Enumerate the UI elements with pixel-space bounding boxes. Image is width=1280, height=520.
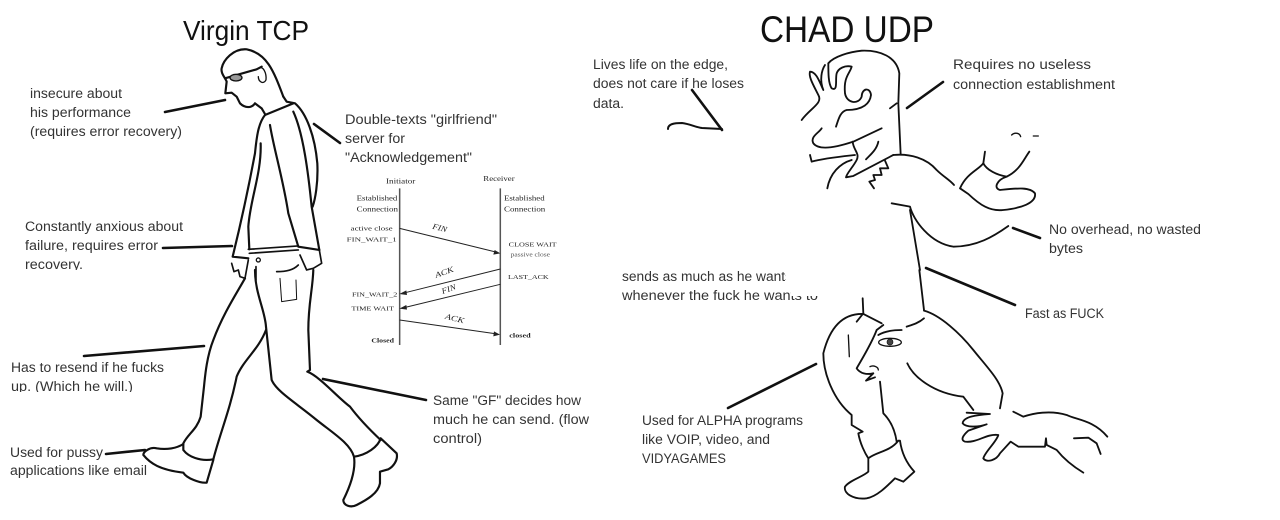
text: same GF: much he can send. (flow — [433, 412, 589, 427]
chart: TCP connection close sequence diagram: LAST_ACK — [508, 274, 549, 281]
figure: chad head and neck — [802, 51, 1038, 270]
text: has to resend: up. (Which he will.) — [11, 379, 133, 394]
text: double-texts: server for — [345, 131, 406, 146]
text: sends as much: sends as much as he wants — [622, 269, 792, 284]
text: requires no useless connection — [953, 57, 1115, 92]
text: used for applications: Used for pussy — [10, 445, 103, 460]
text: constantly anxious: failure, requires error — [25, 238, 159, 253]
chart: TCP connection close sequence diagram: FIN_WAIT_2 — [352, 291, 397, 298]
text: no overhead: bytes — [1049, 241, 1083, 256]
chart: TCP connection close sequence diagram: CLOSE WAIT — [509, 241, 557, 248]
text: lives life on the edge — [593, 57, 744, 111]
text: constantly anxious — [20, 219, 183, 276]
title: Virgin TCP: Virgin TCP — [183, 15, 309, 46]
text: constantly anxious: recovery. — [25, 257, 83, 272]
text: has to resend: Has to resend if he fucks — [11, 360, 164, 375]
callouts: virgin leader lines — [84, 100, 426, 454]
text: sends as much: whenever the fuck he wants to — [621, 288, 818, 303]
text: constantly anxious: Constantly anxious about — [25, 219, 183, 234]
text: used for applications: applications like email — [10, 463, 147, 478]
chart: TCP connection close sequence diagram: Initiator — [386, 176, 416, 185]
title: CHAD UDP: CHAD UDP — [760, 9, 934, 50]
text: lives life on the edge: data. — [593, 96, 624, 111]
text: same GF: Same "GF" decides how — [433, 393, 581, 408]
text: lives life on the edge: does not care if he loses — [593, 76, 744, 91]
text: used for applications — [10, 445, 147, 478]
text: fast as fuck: Fast as FUCK — [1025, 306, 1104, 321]
chart: TCP connection close sequence diagram: Closed — [371, 338, 394, 345]
text: sends as much — [621, 268, 820, 303]
chart: TCP connection close sequence diagram: active close — [351, 226, 393, 233]
chart: TCP connection close sequence diagram: TIME WAIT — [351, 305, 394, 312]
text: requires no useless connection: Requires no useless — [953, 57, 1091, 72]
text: insecure about performance — [30, 86, 182, 139]
text: has to resend — [0, 360, 170, 400]
fragment: clipped arc under lives-life text — [668, 123, 722, 129]
chart: TCP connection close sequence diagram: FIN — [439, 282, 458, 296]
text: insecure about performance: insecure about — [30, 86, 122, 101]
callouts: chad leader lines — [692, 82, 1040, 408]
text: double-texts: "Acknowledgement" — [345, 150, 472, 165]
text: lives life on the edge: Lives life on the edge, — [593, 57, 728, 72]
text: no overhead: No overhead, no wasted — [1049, 222, 1201, 237]
chart: TCP connection close sequence diagram: Connection — [504, 204, 546, 213]
figure: virgin legs — [143, 270, 397, 506]
text: requires no useless connection: connection establishment — [953, 77, 1115, 92]
chart: TCP connection close sequence diagram — [347, 174, 557, 345]
text: same GF: control) — [433, 431, 482, 446]
text: used for alpha programs: Used for ALPHA programs — [642, 413, 803, 428]
text: insecure about performance: (requires error recovery) — [30, 124, 182, 139]
text: used for alpha programs: VIDYAGAMES — [642, 451, 726, 466]
chart: TCP connection close sequence diagram: ACK — [443, 312, 466, 325]
text: used for alpha programs: like VOIP, video, and — [642, 432, 770, 447]
text: same GF — [433, 393, 589, 446]
chart: TCP connection close sequence diagram: Established — [504, 194, 545, 203]
text: double-texts: Double-texts "girlfriend" — [345, 112, 497, 127]
chart: TCP connection close sequence diagram: Connection — [357, 204, 398, 213]
chart: TCP connection close sequence diagram: passive close — [511, 253, 550, 259]
chart: TCP connection close sequence diagram: ACK — [432, 265, 456, 280]
text: double-texts — [345, 112, 497, 165]
text: insecure about performance: his performance — [30, 105, 131, 120]
text: used for alpha programs — [642, 413, 803, 466]
text: no overhead — [1049, 222, 1201, 256]
figure: virgin upper body — [222, 49, 322, 280]
chart: TCP connection close sequence diagram: FIN_WAIT_1 — [347, 237, 397, 244]
chart: TCP connection close sequence diagram: FIN — [430, 222, 449, 234]
figure: chad legs and foot-hand — [823, 270, 1107, 499]
chart: TCP connection close sequence diagram: Established — [357, 194, 398, 203]
chart: TCP connection close sequence diagram: closed — [509, 333, 531, 340]
chart: TCP connection close sequence diagram: Receiver — [483, 174, 515, 183]
